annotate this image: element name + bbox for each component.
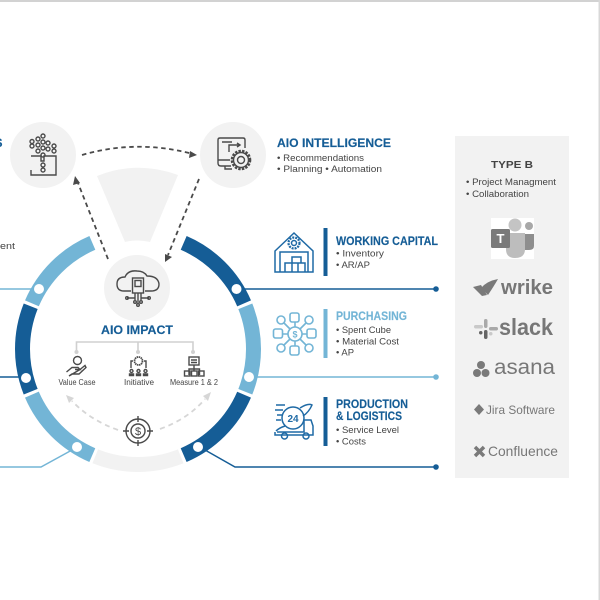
dashed cycle arrows: [78, 147, 199, 259]
logo: wrike: wrike: [500, 277, 553, 299]
panel: production and logistics: • Service Level: [336, 425, 399, 435]
gray wedge: [97, 168, 178, 242]
icon: warehouse: [275, 233, 313, 272]
panel: working capital: WORKING CAPITAL: [336, 234, 438, 248]
impact connector: [74, 342, 195, 354]
panel: working capital: • AR/AP: [336, 260, 370, 270]
logo: slack: [474, 314, 553, 340]
panel: production and logistics: • Costs: [336, 436, 367, 446]
heading block: AIO intelligence: [277, 136, 391, 174]
panel: production and logistics: PRODUCTION: [336, 397, 408, 411]
icon: cloud chip: [117, 271, 159, 306]
icon: initiative: [130, 357, 148, 376]
icon: purchasing network: [274, 313, 316, 355]
logo: slack: slack: [499, 314, 553, 340]
icon: monitor and gear: [218, 138, 250, 169]
icon: target dollar: [123, 416, 153, 446]
logo: Jira Software: Jira Software: [486, 403, 555, 417]
icon: logistics truck: 24: [287, 414, 299, 425]
logo: wrike: [473, 277, 553, 299]
label: measure 1 and 2: Measure 1 & 2: [170, 378, 219, 387]
node circle: AIO intelligence: [200, 122, 266, 188]
heading block: AIO intelligence: • Recommendations: [277, 153, 365, 163]
type B bullets: [466, 177, 557, 199]
heading block: AIO intelligence: AIO INTELLIGENCE: [277, 136, 391, 150]
logo: Teams: T: [497, 231, 505, 246]
heading block: AIO intelligence: • Planning • Automation: [277, 164, 382, 174]
icon: data hand: [30, 134, 56, 175]
panel: purchasing: • AP: [336, 348, 354, 358]
dashed gray arrows: [72, 399, 205, 430]
logo: Confluence: Confluence: [488, 443, 558, 459]
node circle: left: [10, 122, 76, 188]
type B bullets: • Project Managment: [466, 177, 557, 187]
label: initiative: Initiative: [124, 378, 155, 387]
panel: production and logistics: [324, 397, 408, 446]
panel: working capital: • Inventory: [336, 248, 385, 258]
panel: purchasing: • Material Cost: [336, 336, 400, 346]
icon: measure hierarchy: [184, 357, 204, 376]
left cut-off text: ent: [0, 241, 16, 251]
panel: purchasing: PURCHASING: [336, 309, 407, 323]
segmented ring: [0, 197, 290, 501]
type B bullets: • Collaboration: [466, 189, 529, 199]
heading: type B: TYPE B: [491, 159, 533, 171]
logo: Teams: [491, 218, 534, 259]
icon: target dollar: $: [135, 426, 141, 438]
heading: AIO impact: AIO IMPACT: [101, 323, 174, 337]
logo: asana: [473, 356, 555, 379]
gray arrow heads: [66, 392, 211, 403]
panel: purchasing: • Spent Cube: [336, 325, 391, 335]
icon: purchasing network: $: [292, 330, 298, 340]
icon: value case hand: [66, 356, 86, 376]
label: value case: Value Case: [58, 378, 96, 387]
panel: purchasing: [324, 309, 407, 358]
node circle: AIO impact: [104, 255, 170, 321]
panel: type B: [455, 136, 569, 478]
connector lines: [0, 286, 439, 470]
icon: logistics truck: [275, 404, 313, 439]
panel: production and logistics: & LOGISTICS: [336, 409, 402, 423]
arrow heads: [73, 151, 197, 262]
logo: asana: asana: [494, 356, 555, 379]
panel: working capital: [324, 228, 438, 276]
